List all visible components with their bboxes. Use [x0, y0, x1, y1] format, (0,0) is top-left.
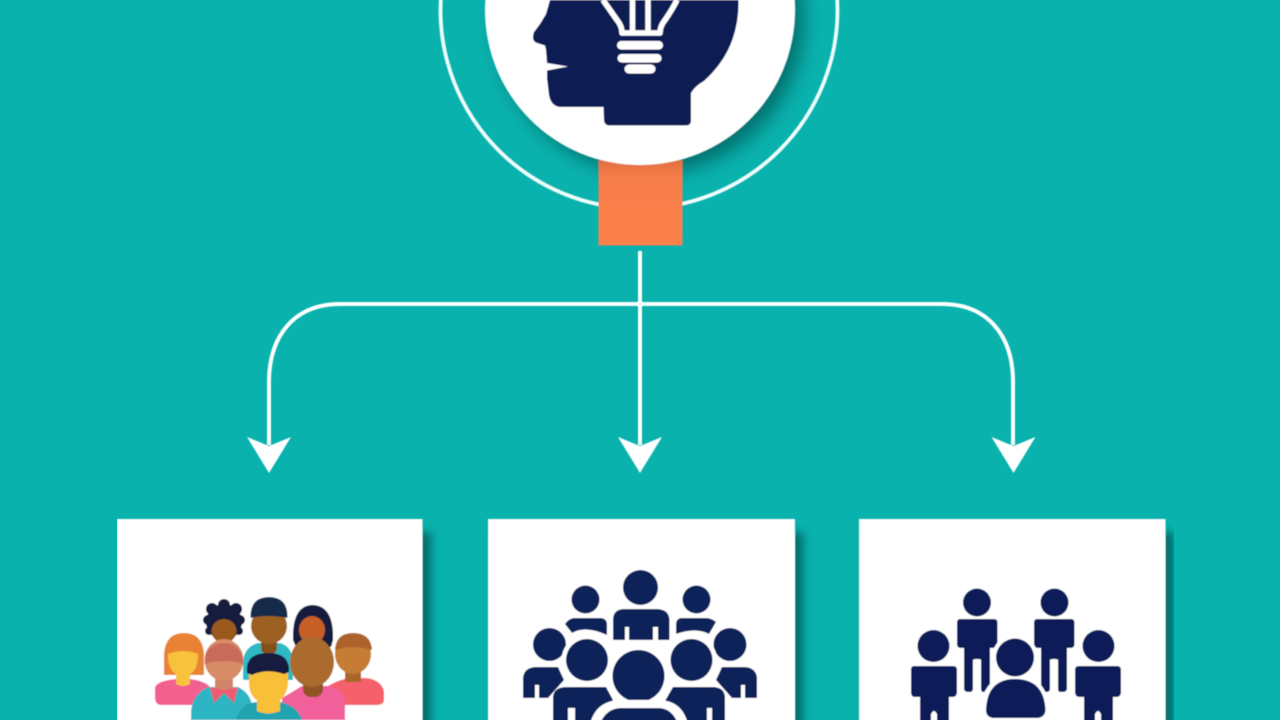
person: upper right — [676, 586, 716, 634]
person: front right — [282, 637, 345, 720]
panel shadow — [497, 532, 803, 720]
person: back left — [957, 588, 998, 692]
bulb outline — [603, 0, 677, 33]
person: front left — [911, 630, 957, 720]
arrowhead: right — [992, 437, 1036, 473]
person: front centre — [236, 653, 302, 720]
outer ring — [440, 0, 838, 208]
icon: navy crowd — [523, 570, 757, 720]
icon: light bulb — [603, 0, 677, 74]
person: front centre — [978, 634, 1052, 720]
white circle — [485, 0, 795, 165]
panel: small team — [859, 519, 1174, 720]
bulb base bars — [617, 41, 663, 50]
person: upper left — [565, 586, 607, 635]
filament — [632, 0, 648, 32]
person: far left — [523, 628, 566, 698]
person: back right — [1034, 588, 1074, 692]
panel card — [117, 519, 422, 720]
circle shadow — [496, 0, 804, 174]
arrows: branching connectors — [269, 251, 1013, 445]
panel card — [859, 519, 1166, 720]
person: mid right — [665, 634, 725, 720]
panel shadow — [868, 532, 1174, 720]
panel: many people — [488, 519, 803, 720]
arrowhead: left — [247, 437, 291, 473]
arrowhead: centre — [618, 437, 662, 473]
icon: navy team — [911, 588, 1121, 720]
person: right man — [328, 633, 384, 705]
person: mid left — [553, 634, 613, 720]
arrow: left and right branches — [269, 304, 1013, 445]
person: left woman — [155, 633, 210, 705]
panel card — [488, 519, 795, 720]
person: back right woman — [293, 605, 333, 654]
person: curly hair — [203, 599, 245, 643]
panel shadow — [126, 532, 431, 720]
person: front centre — [590, 646, 688, 720]
person: front left — [191, 639, 252, 720]
panel: diverse people — [117, 519, 431, 720]
person: front right — [1075, 630, 1121, 720]
central circle with head icon — [485, 0, 795, 165]
orange connector block — [598, 160, 682, 246]
person: back centre — [243, 597, 293, 680]
person: far right — [714, 628, 757, 698]
arrow: centre shaft — [638, 251, 642, 445]
icon: colourful crowd — [155, 597, 384, 720]
person: top centre — [613, 570, 670, 640]
icon: head silhouette — [533, 0, 739, 126]
